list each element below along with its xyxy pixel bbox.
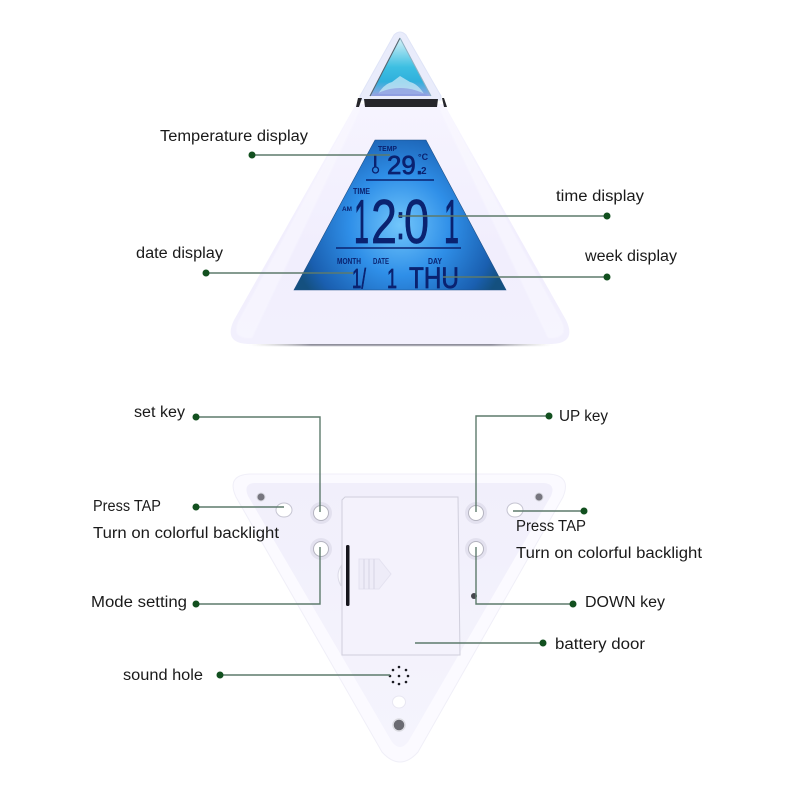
label: date display: date display [136, 245, 223, 262]
label: Temperature display: Temperature display [160, 128, 308, 145]
temperature reading [372, 144, 429, 180]
label: DOWN key [476, 547, 665, 611]
time reading [342, 187, 459, 257]
date and week reading: 1/ [352, 263, 366, 294]
time reading: 2 [371, 188, 397, 257]
label: Press TAP right [513, 508, 703, 562]
temperature reading: 2 [421, 166, 427, 177]
sound hole [389, 666, 409, 685]
label: week display: week display [584, 248, 677, 265]
time reading: TIME [353, 187, 371, 196]
temperature reading: 29. [387, 150, 423, 180]
label: Press TAP left: Turn on colorful backlight [93, 525, 280, 542]
label: time display: time display [556, 188, 644, 205]
label: Press TAP left [93, 498, 284, 542]
date and week reading [337, 257, 459, 295]
clock body [231, 104, 569, 346]
label: Press TAP right: Press TAP [516, 518, 586, 535]
label: set key [134, 404, 320, 512]
label: Mode setting [91, 547, 320, 611]
label: week display [443, 248, 677, 280]
time reading: : [396, 194, 405, 250]
temperature reading: °C [418, 152, 429, 162]
prism top [356, 32, 447, 107]
temperature reading: TEMP [378, 144, 397, 153]
date and week reading: DAY [428, 257, 443, 266]
label: date display [136, 245, 353, 276]
label: UP key [476, 408, 608, 512]
time reading: AM [342, 207, 352, 213]
label: DOWN key: DOWN key [585, 594, 665, 611]
label: battery door: battery door [555, 636, 645, 653]
label: Press TAP left: Press TAP [93, 498, 161, 515]
LCD screen [294, 140, 506, 295]
label: sound hole [123, 667, 390, 684]
buttons [276, 502, 523, 708]
clock back view [233, 474, 565, 762]
date and week reading: 1 [387, 263, 397, 294]
clock front view [231, 32, 569, 346]
screws [257, 493, 543, 731]
date and week reading: DATE [373, 257, 389, 266]
back shell [233, 474, 565, 762]
time reading: 1 [354, 188, 369, 257]
label: Temperature display [160, 128, 390, 158]
label: sound hole: sound hole [123, 667, 203, 684]
LCD screen: 1 [444, 188, 459, 257]
label: battery door [415, 636, 645, 653]
label: time display [398, 188, 644, 220]
label: Mode setting: Mode setting [91, 594, 187, 611]
label: Press TAP right: Turn on colorful backlight [516, 545, 703, 562]
date and week reading: MONTH [337, 257, 361, 266]
label: set key: set key [134, 404, 185, 421]
date and week reading: THU [409, 262, 459, 295]
time reading: 0 [404, 188, 429, 257]
label: UP key: UP key [559, 408, 608, 425]
battery door [338, 497, 460, 655]
